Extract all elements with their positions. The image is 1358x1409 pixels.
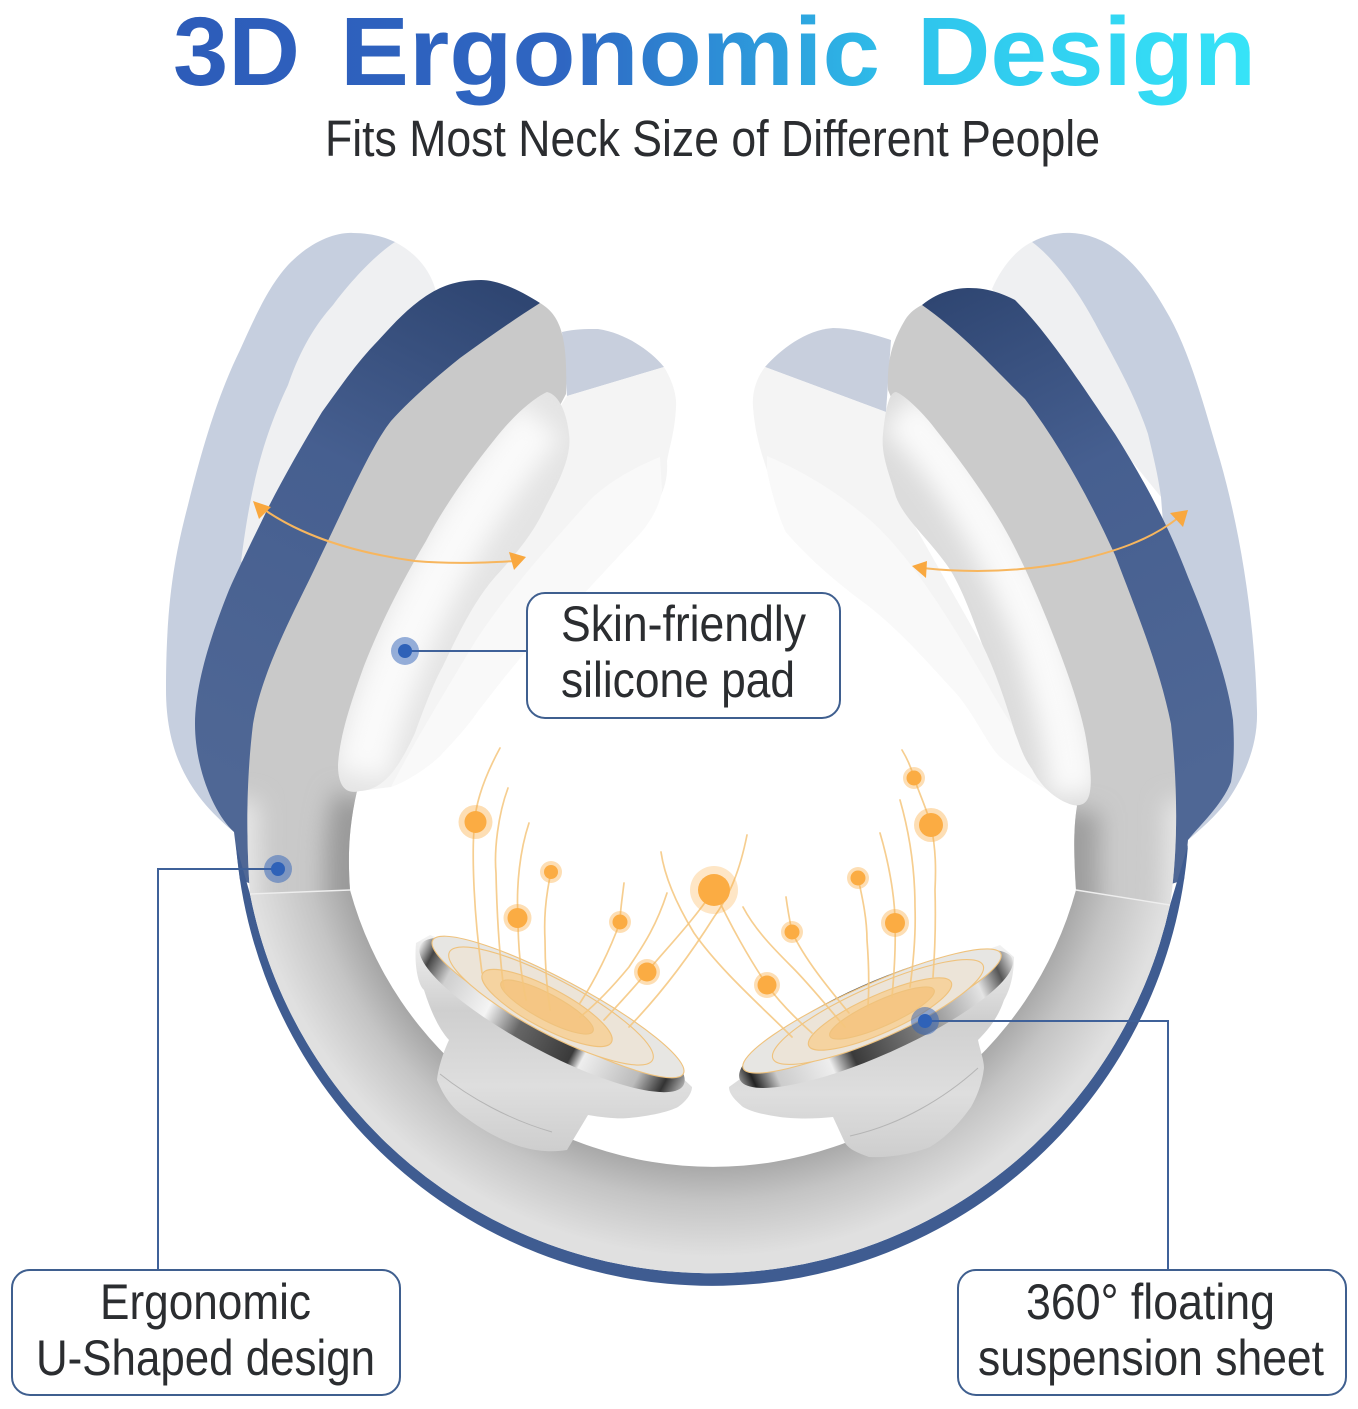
massage wave lines xyxy=(473,748,936,1037)
callout: ergonomic U-shaped design xyxy=(12,855,400,1395)
arrow: right arm flex xyxy=(912,510,1188,578)
right blue band xyxy=(922,288,1234,900)
U-shaped neck massager device xyxy=(166,233,1257,1286)
right massage head xyxy=(725,926,1027,1157)
right back ghost arm xyxy=(992,233,1257,840)
right silicone pad xyxy=(878,385,1098,810)
left grey arm xyxy=(247,303,566,894)
left back ghost arm xyxy=(166,233,437,832)
callout: skin-friendly silicone pad: Skin-friendly xyxy=(561,596,806,652)
callout: ergonomic U-shaped design: Ergonomic xyxy=(100,1274,311,1330)
left front ghost pad xyxy=(360,329,676,791)
title: Design xyxy=(917,0,1256,106)
left blue band xyxy=(195,280,540,900)
title xyxy=(173,0,1256,106)
subtitle: Fits Most Neck Size of Different People xyxy=(325,110,1100,167)
callout: 360 floating suspension sheet: 360° floating xyxy=(1026,1274,1275,1330)
arrow: left arm flex xyxy=(253,501,526,570)
right grey arm xyxy=(888,305,1176,905)
title: Ergonomic xyxy=(340,0,880,106)
seam lines xyxy=(250,890,1170,905)
right front ghost pad xyxy=(753,328,1073,805)
lower blue ring xyxy=(236,845,1188,1286)
callout: ergonomic U-shaped design: U-Shaped design xyxy=(36,1330,375,1386)
callout: 360 floating suspension sheet: suspension sheet xyxy=(978,1330,1324,1386)
left massage head xyxy=(403,912,701,1151)
callout: 360 floating suspension sheet xyxy=(911,1007,1346,1395)
left silicone pad xyxy=(330,385,575,800)
title: 3D xyxy=(173,0,300,106)
callout: skin-friendly silicone pad xyxy=(391,593,840,718)
lower grey ring xyxy=(250,890,1170,1273)
callout: skin-friendly silicone pad: silicone pad xyxy=(561,652,795,708)
massage pulse dots xyxy=(458,767,948,998)
